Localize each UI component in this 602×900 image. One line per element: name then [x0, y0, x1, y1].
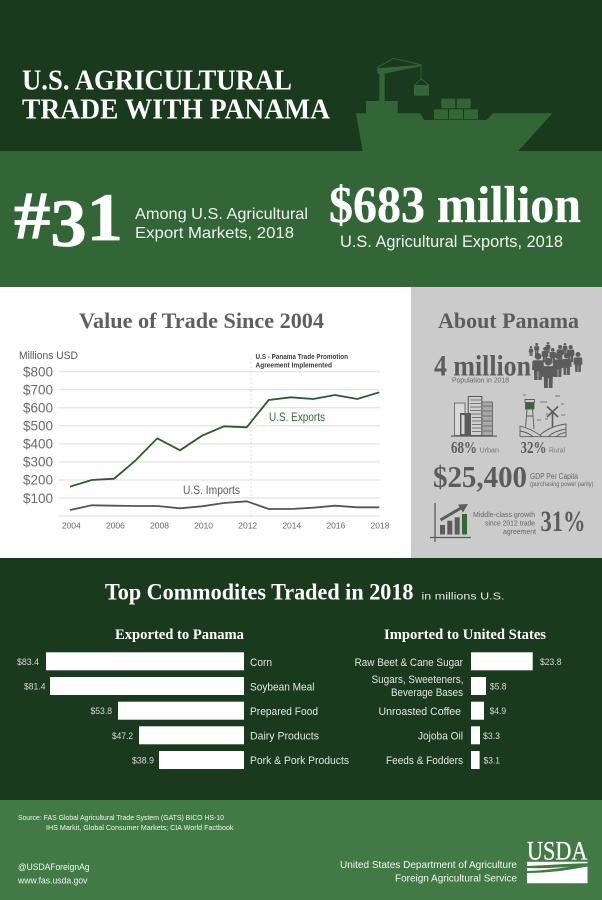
annotation: trade agreement: Agreement Implemented [256, 362, 332, 370]
stat: middle-class growth caption: since 2012 trade [485, 518, 535, 528]
bar chart: imports: $3.1 [484, 756, 500, 766]
panel: footer [0, 800, 602, 900]
x axis labels: 2018 [371, 520, 390, 530]
social handle and website [17, 862, 90, 886]
bar chart: exports: $47.2 [112, 731, 133, 741]
bar chart: imports: Beverage Bases [391, 687, 463, 699]
label: U.S. imports: U.S. Imports [183, 485, 240, 497]
icon: growth chart [430, 503, 471, 542]
stat: GDP per capita: (purchasing power parity) [530, 482, 594, 488]
rank caption: Export Markets, 2018 [135, 225, 294, 242]
panel: about Panama [411, 287, 602, 558]
social handle and website: @USDAForeignAg [18, 862, 90, 873]
social handle and website: www.fas.usda.gov [17, 876, 88, 886]
stat: GDP per capita: $25,400 [433, 459, 527, 494]
panel: top commodities [0, 558, 602, 800]
axis title: Millions USD [19, 350, 78, 362]
icon: city buildings [451, 396, 497, 437]
line: U.S. imports [70, 501, 379, 510]
y axis labels: $200 [23, 472, 53, 488]
logo: USDA [527, 836, 588, 883]
stat: middle-class growth caption [473, 510, 537, 536]
panel: header [0, 0, 602, 151]
bar chart: exports: Soybean Meal [250, 682, 314, 694]
bar chart: imports: $3.3 [483, 731, 500, 741]
panel: key figures [0, 151, 602, 287]
stat: middle-class growth caption: agreement [503, 527, 537, 536]
bar chart: imports: Sugars, Sweeteners, [372, 674, 464, 686]
source note: IHS Markit, Global Consumer Markets; CIA World Factbook [46, 823, 234, 832]
logo: USDA: USDA [527, 836, 588, 865]
bar chart: imports: $23.8 [540, 657, 562, 667]
bar chart: imports: Jojoba Oil [418, 730, 463, 742]
source note [18, 813, 234, 832]
icon: rural landscape [520, 395, 566, 437]
stat: middle-class growth value: 31% [540, 505, 586, 538]
bar chart: imports: $5.8 [490, 682, 506, 692]
x axis labels [62, 520, 390, 530]
imports heading: Imported to United States [384, 627, 546, 643]
stat: middle-class growth caption: Middle-class growth [473, 510, 535, 519]
y axis labels: $700 [23, 382, 53, 398]
y axis labels: $400 [23, 436, 53, 452]
stat: urban: Urban [480, 448, 499, 454]
bar chart: imports: Unroasted Coffee [378, 706, 461, 718]
annotation: trade agreement [256, 354, 348, 370]
x axis labels: 2016 [326, 520, 346, 530]
y axis labels: $100 [23, 491, 53, 506]
x axis labels: 2010 [194, 520, 213, 530]
bar chart: exports: $83.4 [17, 657, 39, 667]
y axis labels: $600 [23, 400, 53, 416]
title: TRADE WITH PANAMA [22, 94, 331, 126]
label: U.S. exports: U.S. Exports [269, 412, 325, 424]
stat: GDP per capita: GDP Per Capita [530, 472, 579, 481]
y axis labels: $500 [23, 418, 53, 434]
icon: cargo ship [356, 58, 552, 151]
bar chart: exports: $81.4 [24, 682, 46, 692]
y axis labels [23, 364, 53, 506]
about heading: About Panama [438, 308, 579, 333]
rank number: 3 [50, 185, 87, 261]
stat: urban [451, 438, 499, 457]
title [22, 66, 331, 126]
x axis labels: 2014 [282, 520, 302, 530]
rank number: # [14, 177, 48, 253]
y axis labels: $300 [23, 454, 53, 470]
stat: urban: 68% [451, 438, 477, 457]
bar chart: exports: Corn [250, 657, 272, 669]
line chart [23, 358, 390, 530]
rank caption: Among U.S. Agricultural [135, 206, 308, 223]
panel: value of trade [0, 287, 411, 558]
department name [340, 859, 517, 884]
department name: United States Department of Agriculture [340, 859, 517, 871]
bar chart: exports: Prepared Food [250, 706, 318, 718]
stat: rural: Rural [549, 448, 565, 454]
population caption: Population in 2018 [452, 376, 509, 384]
export value: $683 million [329, 177, 581, 234]
rank caption [135, 206, 308, 242]
export caption: U.S. Agricultural Exports, 2018 [340, 233, 563, 251]
department name: Foreign Agricultural Service [395, 872, 517, 884]
bar chart: imports: Feeds & Fodders [386, 755, 463, 767]
chart heading: Value of Trade Since 2004 [79, 308, 324, 333]
stat: rural: 32% [520, 438, 546, 457]
y axis labels: $800 [23, 364, 53, 380]
bar chart: imports [355, 652, 562, 769]
icon: people [529, 342, 582, 388]
rank number: 1 [87, 179, 123, 255]
commodities heading: Top Commodites Traded in 2018 [105, 580, 414, 606]
x axis labels: 2008 [150, 520, 169, 530]
bar chart: imports: $4.9 [490, 706, 506, 716]
bar chart: exports [17, 652, 349, 769]
bar chart: exports: Dairy Products [250, 730, 319, 742]
bar chart: imports: Raw Beet & Cane Sugar [355, 657, 463, 669]
x axis labels: 2004 [62, 520, 81, 530]
bar chart: exports: $38.9 [132, 756, 154, 766]
annotation: trade agreement: U.S - Panama Trade Promotion [256, 354, 348, 361]
exports heading: Exported to Panama [115, 627, 245, 643]
stat: GDP per capita [433, 459, 594, 494]
bar chart: exports: Pork & Pork Products [250, 755, 349, 767]
bar chart: exports: $53.8 [90, 706, 112, 716]
line: U.S. exports [70, 392, 379, 487]
title: U.S. AGRICULTURAL [22, 66, 292, 96]
source note: Source: FAS Global Agricultural Trade System (GATS) BICO HS-10 [18, 813, 224, 822]
population figure: 4 million [434, 350, 531, 382]
x axis labels: 2012 [238, 520, 257, 530]
x axis labels: 2006 [106, 520, 125, 530]
units note: in millions U.S. [422, 590, 504, 602]
